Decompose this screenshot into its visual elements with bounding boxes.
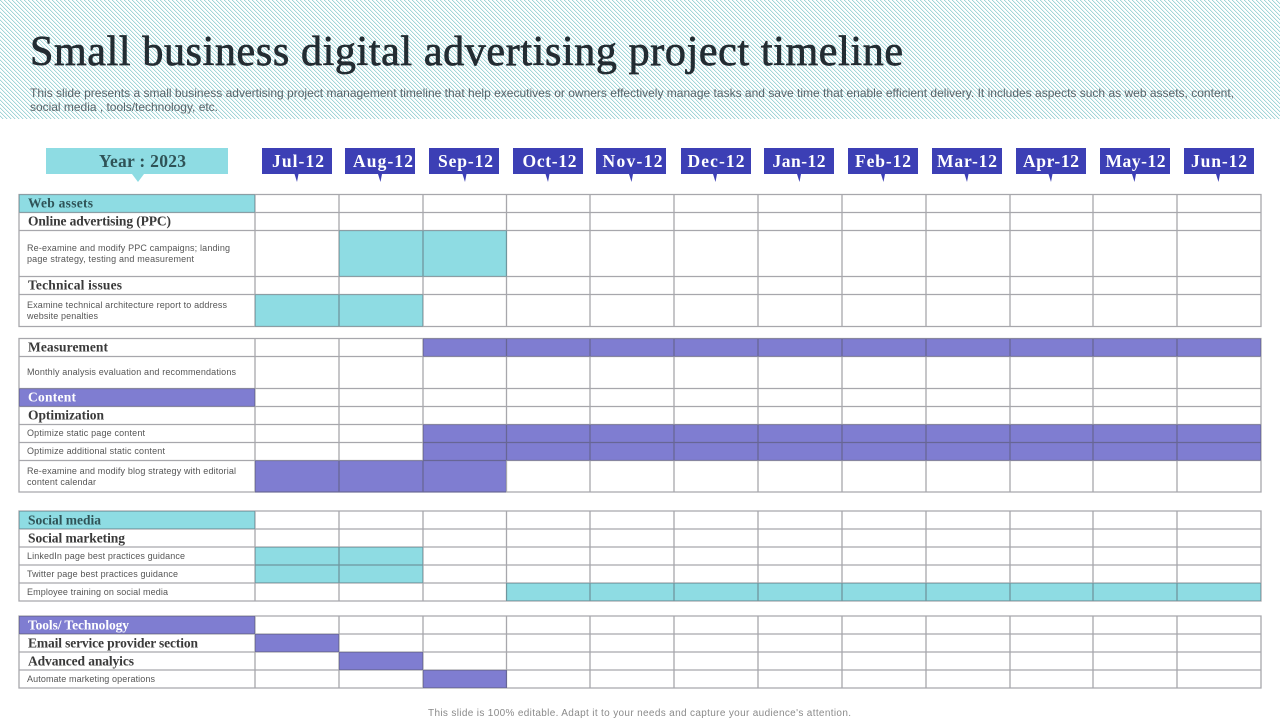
month: Apr-12: Apr-12	[1023, 151, 1079, 171]
month headers	[262, 148, 1254, 182]
row labels: Measurement	[28, 340, 108, 354]
month: Sep-12: Sep-12	[438, 151, 493, 171]
row labels: page strategy, testing and measurement	[27, 254, 194, 264]
month: Sep-12	[429, 148, 499, 182]
year label	[46, 148, 228, 182]
month: Dec-12	[681, 148, 751, 182]
footer note: This slide is 100% editable. Adapt it to your needs and capture your audience's attention.	[428, 708, 851, 719]
month: Jan-12: Jan-12	[772, 151, 826, 171]
month: Jul-12: Jul-12	[272, 151, 324, 171]
row labels: LinkedIn page best practices guidance	[27, 551, 185, 561]
row labels: Web assets	[28, 196, 93, 210]
month: Jul-12	[262, 148, 332, 182]
header band	[0, 0, 1280, 119]
row labels: Social marketing	[28, 530, 125, 546]
row labels: Employee training on social media	[27, 587, 168, 597]
row labels	[27, 618, 198, 684]
month: Oct-12	[513, 148, 583, 182]
panel: tools and technology table	[19, 616, 1261, 688]
description	[30, 86, 1234, 114]
row labels: Advanced analyics	[28, 654, 134, 668]
month: May-12	[1100, 148, 1170, 182]
description: social media , tools/technology, etc.	[30, 100, 218, 114]
description: This slide presents a small business advertising project management timeline that help executives or owners effectively manage tasks and save time that enable efficient delivery. It includes aspects such as web assets, content,	[30, 86, 1234, 100]
row labels: Automate marketing operations	[27, 674, 156, 684]
month: Nov-12	[596, 148, 666, 182]
month: Aug-12: Aug-12	[353, 151, 413, 171]
month: Apr-12	[1016, 148, 1086, 182]
row labels: Content	[28, 390, 76, 404]
panel: measurement and content table	[19, 338, 1261, 492]
row labels: Examine technical architecture report to address	[27, 300, 228, 310]
month: Aug-12	[345, 148, 415, 182]
row labels: content calendar	[27, 477, 96, 487]
month: Feb-12: Feb-12	[855, 151, 911, 171]
year label: Year : 2023	[99, 151, 186, 171]
row labels: Optimization	[28, 408, 104, 422]
row labels: Re-examine and modify PPC campaigns; landing	[27, 243, 230, 253]
month: Feb-12	[848, 148, 918, 182]
month: Jan-12	[764, 148, 834, 182]
month: Oct-12: Oct-12	[522, 151, 576, 171]
month: Dec-12: Dec-12	[688, 151, 744, 171]
month: Mar-12	[932, 148, 1002, 182]
row labels	[27, 512, 185, 597]
row labels: Tools/ Technology	[28, 618, 129, 632]
row labels: website penalties	[26, 311, 98, 321]
row labels: Twitter page best practices guidance	[27, 569, 178, 579]
month: May-12: May-12	[1106, 151, 1166, 171]
panel: web assets table	[19, 194, 1261, 326]
row labels: Re-examine and modify blog strategy with editorial	[27, 466, 236, 476]
row labels	[27, 340, 236, 487]
row labels: Email service provider section	[28, 636, 198, 650]
row labels	[26, 196, 230, 321]
row labels: Social media	[28, 512, 101, 528]
row labels: Technical issues	[28, 278, 122, 292]
panel: social media table	[19, 511, 1261, 601]
row labels: Optimize static page content	[27, 428, 145, 438]
month: Mar-12: Mar-12	[937, 151, 997, 171]
title: Small business digital advertising project timeline	[30, 29, 903, 75]
month: Jun-12: Jun-12	[1191, 151, 1247, 171]
row labels: Optimize additional static content	[27, 446, 165, 456]
row labels: Online advertising (PPC)	[28, 214, 171, 228]
row labels: Monthly analysis evaluation and recommendations	[27, 367, 236, 377]
month: Nov-12: Nov-12	[602, 151, 662, 171]
month: Jun-12	[1184, 148, 1254, 182]
